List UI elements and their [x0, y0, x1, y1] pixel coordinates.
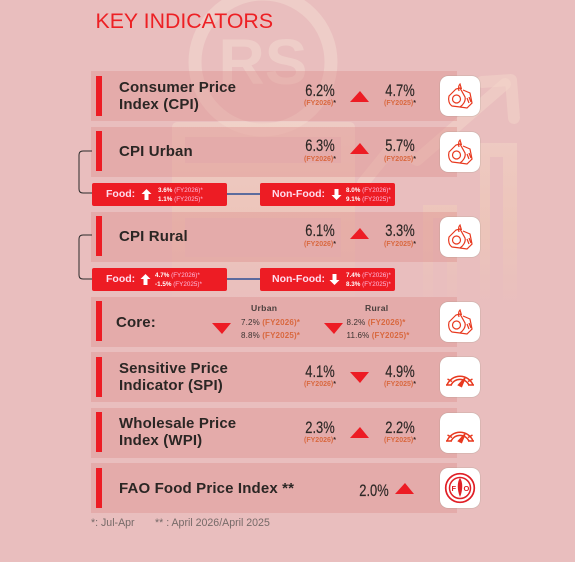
panel: fao food price index: FAO Food Price Index **	[119, 480, 294, 497]
panel: wholesale price index: Index (WPI)	[119, 432, 202, 449]
panel: core: 7.2% (FY2026)*	[241, 318, 300, 326]
footnotes: ** : April 2026/April 2025	[155, 517, 270, 529]
footnotes	[91, 517, 270, 529]
panel: cpi rural: 4.7% (FY2026)*	[155, 272, 200, 278]
panel: cpi urban: Food:	[106, 188, 135, 200]
panel: cpi urban	[78, 127, 480, 206]
footnotes: *: Jul-Apr	[91, 517, 135, 529]
panel: consumer price index: Index (CPI)	[119, 96, 199, 113]
panel: core	[91, 297, 480, 347]
panel: cpi urban: (FY2026)*	[304, 156, 336, 163]
panel: cpi rural: (FY2025)*	[384, 241, 416, 248]
panel: cpi rural: (FY2026)*	[304, 241, 336, 248]
panel: sensitive price indicator: 4.9%	[385, 362, 414, 380]
panel: cpi rural: 8.3% (FY2025)*	[346, 280, 391, 288]
panel: sensitive price indicator: 4.1%	[305, 362, 334, 380]
background watermark: RS	[219, 26, 307, 98]
panel: consumer price index: 4.7%	[385, 80, 414, 100]
panel: cpi rural: 7.4% (FY2026)*	[346, 272, 391, 278]
panel: consumer price index: 6.2%	[305, 80, 334, 100]
panel: cpi rural: Non-Food:	[272, 273, 325, 285]
panel: wholesale price index: (FY2026)*	[304, 437, 336, 444]
panel: wholesale price index: 2.2%	[385, 418, 414, 436]
panel: core: Core:	[116, 314, 156, 331]
panel: cpi rural: 6.1%	[305, 220, 334, 240]
panel: consumer price index: (FY2026)*	[304, 100, 336, 107]
panel: cpi urban: 5.7%	[385, 136, 414, 154]
panel: fao food price index: O	[464, 484, 470, 493]
panel: core: Urban	[251, 303, 277, 313]
panel: consumer price index	[91, 71, 480, 121]
panel: cpi urban: Non-Food:	[272, 188, 325, 200]
panel: fao food price index: 2.0%	[359, 480, 388, 500]
panel: cpi rural: 3.3%	[385, 220, 414, 240]
panel: sensitive price indicator: (FY2026)*	[304, 381, 336, 388]
panel: cpi rural: CPI Rural	[119, 228, 188, 245]
panel: cpi urban: 6.3%	[305, 136, 334, 154]
panel: sensitive price indicator: Indicator (SPI)	[119, 377, 223, 394]
title: KEY INDICATORS	[96, 9, 273, 33]
panel: cpi urban: 1.1% (FY2025)*	[158, 196, 203, 202]
panel: fao food price index: F	[452, 484, 456, 493]
panel: cpi urban: 9.1% (FY2025)*	[346, 196, 391, 202]
panel: cpi rural	[78, 212, 480, 291]
panel: sensitive price indicator: (FY2025)*	[384, 381, 416, 388]
panel: sensitive price indicator	[91, 352, 480, 402]
panel: consumer price index: Consumer Price	[119, 78, 236, 96]
panel: cpi rural: Food:	[106, 273, 135, 285]
panel: wholesale price index: Wholesale Price	[119, 414, 236, 432]
panel: core: 8.2% (FY2026)*	[346, 318, 406, 326]
panel: wholesale price index: (FY2025)*	[384, 437, 416, 444]
panel: sensitive price indicator: Sensitive Price	[119, 360, 228, 376]
panel: core: 11.6% (FY2025)*	[346, 330, 410, 340]
panel: core: 8.8% (FY2025)*	[241, 330, 300, 340]
panel: cpi urban: 3.6% (FY2026)*	[158, 186, 203, 194]
panel: cpi urban: (FY2025)*	[384, 156, 416, 163]
panel: consumer price index: (FY2025)*	[384, 100, 416, 107]
panel: cpi urban: 8.0% (FY2026)*	[346, 186, 391, 194]
panel: core: Rural	[365, 303, 388, 313]
panel: wholesale price index: 2.3%	[305, 418, 334, 436]
panel: cpi urban: CPI Urban	[119, 143, 193, 160]
panel: cpi rural: -1.5% (FY2025)*	[155, 280, 202, 288]
